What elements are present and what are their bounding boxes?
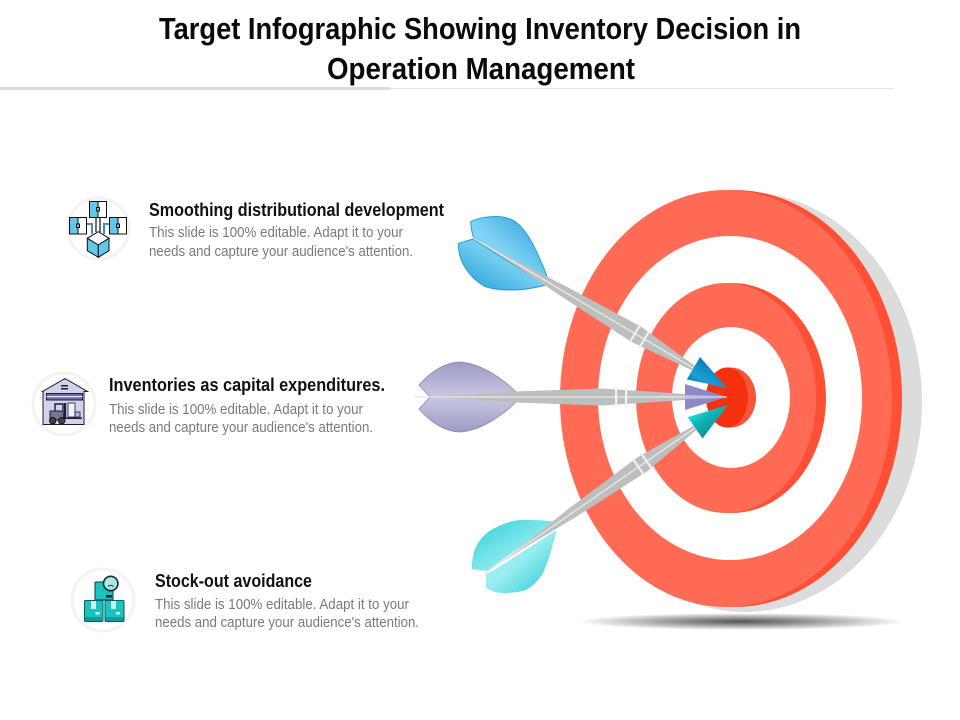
title xyxy=(159,11,801,86)
target shadow on floor xyxy=(578,613,904,630)
text block: stock-out xyxy=(155,570,419,631)
dart: top blue xyxy=(458,216,734,399)
icon: warehouse forklift xyxy=(33,373,95,435)
icon: distribution cubes xyxy=(68,198,129,259)
text block: stock-out: This slide is 100% editable. Adapt it to your xyxy=(155,596,409,613)
text block: smoothing: Smoothing distributional development xyxy=(149,199,444,220)
text block: smoothing xyxy=(149,199,444,260)
text block: inventories: Inventories as capital expenditures. xyxy=(109,374,385,395)
dart: middle purple xyxy=(415,362,727,432)
text block: smoothing: This slide is 100% editable. Adapt it to your xyxy=(149,224,403,241)
text block: stock-out: Stock-out avoidance xyxy=(155,570,312,591)
text block: inventories: This slide is 100% editable. Adapt it to your xyxy=(109,401,363,418)
dart: bottom teal xyxy=(472,394,735,593)
text block: inventories xyxy=(109,374,385,436)
text block: inventories: needs and capture your audience's attention. xyxy=(109,419,373,436)
text block: smoothing: needs and capture your audience's attention. xyxy=(149,243,413,260)
title: Target Infographic Showing Inventory Decision in xyxy=(159,11,801,46)
target board xyxy=(560,190,922,612)
icon: stock boxes with magnifier xyxy=(72,569,134,631)
text block: stock-out: needs and capture your audience's attention. xyxy=(155,614,419,631)
title: Operation Management xyxy=(327,51,635,86)
